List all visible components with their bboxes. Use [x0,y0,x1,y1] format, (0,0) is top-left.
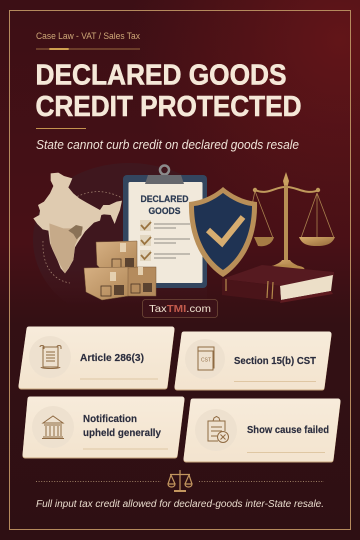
card: Section 15(b) CST: Section 15(b) CST [234,355,317,367]
dashed orbit [43,192,122,283]
notification label: Notification [83,413,137,425]
icon: CST book [185,339,225,379]
title: CREDIT PROTECTED [36,91,302,123]
notification label: upheld generally [83,427,161,439]
card: Section 15(b) CST [177,334,329,388]
icon: failed notice [195,409,237,451]
eyebrow: Case Law - VAT / Sales Tax [36,31,140,41]
footer divider [36,470,324,491]
box right [126,267,156,296]
icon: CST book: CST [201,358,211,364]
site badge: TaxTMI.com [149,303,211,315]
scales of justice [245,172,335,274]
title: DECLARED GOODS [36,60,286,92]
box bottom left [84,267,128,300]
title [36,60,302,123]
notification label [83,413,161,439]
card: Notification upheld generally [25,399,182,456]
clip [145,166,184,184]
shield check [208,217,243,243]
clipboard heading [140,194,189,217]
box top [96,241,137,271]
icon: footer scales [168,470,192,491]
card: Article 286(3) [21,329,172,387]
card: Article 286(3): Article 286(3) [80,352,144,364]
subtitle: State cannot curb credit on declared goods resale [36,138,299,152]
card: Show cause failed: Show cause failed [247,424,329,436]
clipboard heading: DECLARED [140,194,189,205]
icon: courthouse [32,406,74,448]
card: Show cause failed [186,401,338,460]
footer statement: Full input tax credit allowed for declared-goods inter-State resale. [36,499,324,510]
hero illustration [33,163,335,305]
checklist [140,220,190,261]
clipboard heading: GOODS [148,206,180,217]
law book [222,265,334,303]
shield [189,187,257,277]
eyebrow rule [36,48,140,50]
india map [33,173,122,273]
title rule [36,128,86,130]
cardboard boxes [84,241,156,300]
clipboard [123,166,207,288]
backdrop circle [33,163,207,305]
site badge [142,300,218,318]
icon: scroll [29,336,71,378]
